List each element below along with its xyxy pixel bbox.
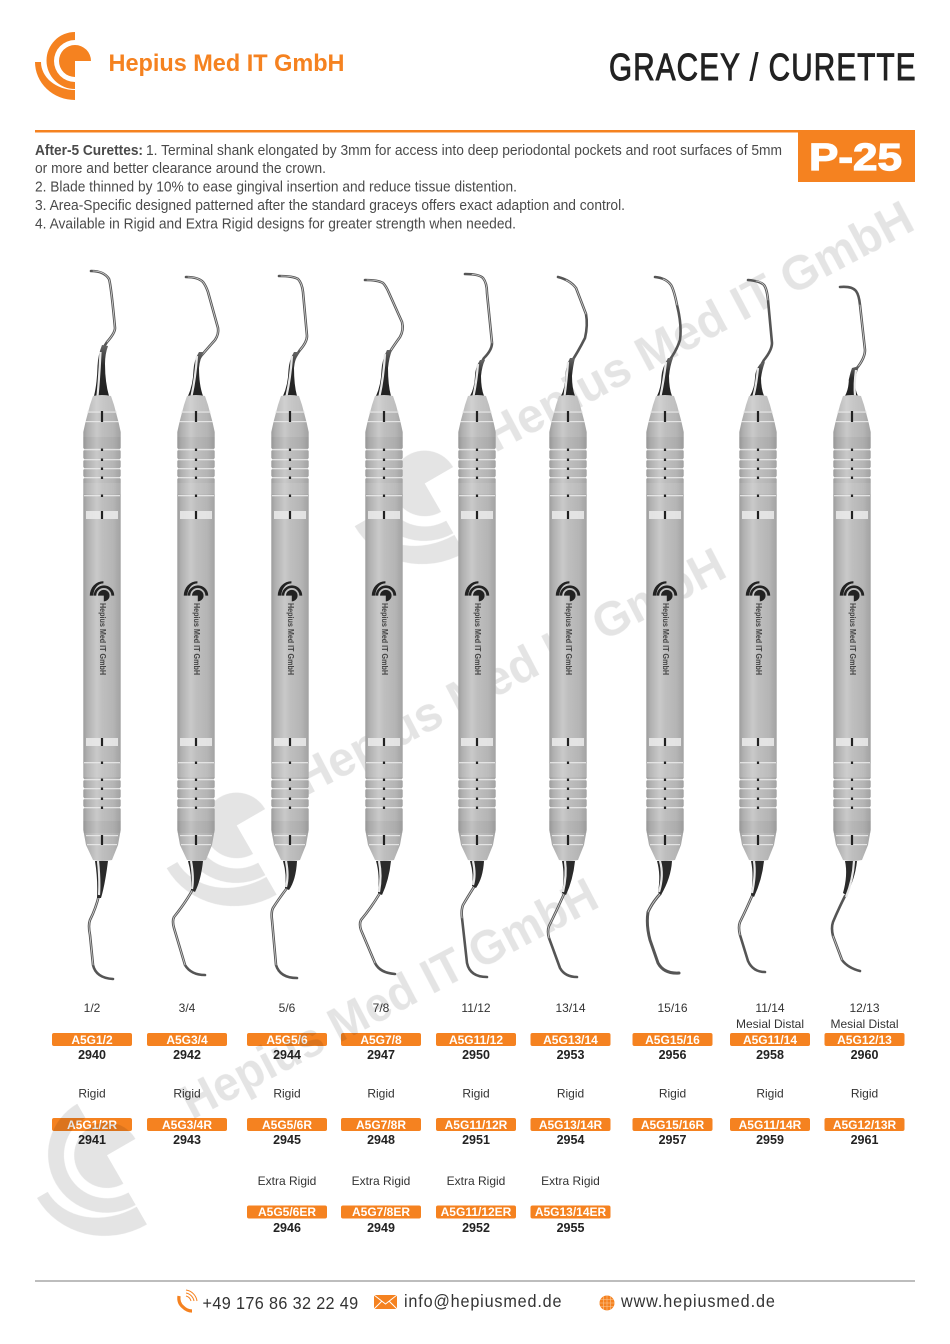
product codes: column 1/2: 2940 <box>78 1048 106 1062</box>
instrument 12/13 mesial distal: Hepius Med IT GmbH <box>848 603 857 675</box>
product codes: column 5/6 <box>247 1001 327 1235</box>
product codes: column 1/2: Rigid <box>78 1086 106 1100</box>
product codes: column 13/14: 2955 <box>557 1221 584 1235</box>
product codes: column 1/2: A5G1/2R <box>67 1118 117 1132</box>
phone number: +49 176 86 32 22 49 <box>202 1293 358 1313</box>
icon: phone <box>179 1290 197 1311</box>
logo icon <box>35 32 91 100</box>
orange rule <box>35 130 798 132</box>
product codes: column 1/2: 2941 <box>78 1133 106 1147</box>
product codes: column 11/12: A5G11/12R <box>445 1118 508 1132</box>
product codes: column 12/13 mesial distal: 2961 <box>851 1133 878 1147</box>
product codes: column 7/8: 2949 <box>367 1221 395 1235</box>
product codes: column 11/14 mesial distal: A5G11/14 <box>743 1033 797 1047</box>
product codes: column 3/4: Rigid <box>173 1086 201 1100</box>
product codes: column 5/6: A5G5/6R <box>262 1118 312 1132</box>
page code badge: P-25 <box>809 137 902 179</box>
product codes: column 7/8: A5G7/8R <box>356 1118 406 1132</box>
description text: 4. Available in Rigid and Extra Rigid designs for greater strength when needed. <box>35 216 516 232</box>
description text: After-5 Curettes: <box>35 142 143 159</box>
instrument 11/12 <box>458 274 496 977</box>
product codes: column 13/14: A5G13/14R <box>539 1118 603 1132</box>
product codes: column 11/12: 2950 <box>462 1048 490 1062</box>
product codes: column 15/16: 15/16 <box>657 1001 688 1015</box>
product codes: column 7/8: Rigid <box>367 1086 395 1100</box>
product codes: column 13/14: 13/14 <box>555 1001 586 1015</box>
product codes: column 11/14 mesial distal: Mesial Distal <box>736 1017 804 1031</box>
description text: or more and better clearance around the crown. <box>35 160 326 177</box>
title: GRACEY / CURETTE <box>609 47 916 89</box>
instrument 1/2 <box>83 271 121 979</box>
product codes: column 5/6: A5G5/6 <box>266 1033 308 1047</box>
product codes: column 3/4: A5G3/4R <box>162 1118 212 1132</box>
product codes: column 7/8: A5G7/8 <box>360 1033 402 1047</box>
product codes: column 15/16: A5G15/16R <box>641 1118 705 1132</box>
product codes: column 15/16: 2957 <box>659 1133 686 1147</box>
product codes: column 7/8: 2947 <box>367 1048 395 1062</box>
product codes: column 15/16: Rigid <box>659 1086 686 1100</box>
product codes: column 7/8 <box>341 1001 421 1235</box>
instrument 7/8: Hepius Med IT GmbH <box>380 603 389 675</box>
product codes: column 5/6: Extra Rigid <box>258 1174 316 1188</box>
description text: 2. Blade thinned by 10% to ease gingival insertion and reduce tissue distention. <box>35 178 517 196</box>
product codes: column 11/12: A5G11/12ER <box>441 1205 512 1219</box>
product codes: column 13/14: A5G13/14 <box>543 1033 598 1047</box>
product codes: column 12/13 mesial distal: Mesial Distal <box>830 1017 899 1031</box>
product codes: column 13/14: 2953 <box>557 1048 584 1062</box>
instrument 3/4 <box>173 277 218 975</box>
instrument 11/14 mesial distal: Hepius Med IT GmbH <box>754 603 763 675</box>
instrument 3/4: Hepius Med IT GmbH <box>192 603 201 675</box>
product codes: column 3/4: A5G3/4 <box>166 1033 208 1047</box>
description text <box>35 142 782 232</box>
instrument 11/12: Hepius Med IT GmbH <box>473 603 482 675</box>
product codes: column 11/14 mesial distal: 2959 <box>756 1133 784 1147</box>
product codes: column 5/6: A5G5/6ER <box>258 1205 316 1219</box>
instrument 15/16: Hepius Med IT GmbH <box>661 603 670 675</box>
product codes: column 13/14: 2954 <box>557 1133 584 1147</box>
description text: 1. Terminal shank elongated by 3mm for access into deep periodontal pockets and root surfaces of 5mm <box>146 142 782 159</box>
product codes: column 15/16 <box>632 1001 712 1147</box>
product codes: column 7/8: A5G7/8ER <box>352 1205 410 1219</box>
product codes: column 12/13 mesial distal: Rigid <box>851 1086 878 1100</box>
product codes: column 1/2 <box>52 1001 132 1147</box>
product codes: column 5/6: 2945 <box>273 1133 301 1147</box>
product codes: column 3/4: 3/4 <box>179 1001 196 1015</box>
brand name: Hepius Med IT GmbH <box>108 50 344 77</box>
product codes: column 11/12: A5G11/12 <box>449 1033 503 1047</box>
product codes: column 11/12: Rigid <box>462 1086 490 1100</box>
product codes: column 11/12: 2951 <box>462 1133 490 1147</box>
watermark: centre: Hepius Med IT GmbH <box>287 538 734 806</box>
instrument 13/14 <box>548 277 587 977</box>
website: www.hepiusmed.de <box>620 1291 775 1311</box>
product codes: column 15/16: A5G15/16 <box>645 1033 700 1047</box>
instrument 1/2: Hepius Med IT GmbH <box>98 603 107 675</box>
product codes: column 1/2: A5G1/2 <box>71 1033 113 1047</box>
instrument 15/16 <box>646 277 684 973</box>
product codes: column 5/6: 5/6 <box>279 1001 296 1015</box>
product codes: column 12/13 mesial distal: A5G12/13R <box>833 1118 897 1132</box>
instrument 5/6 <box>271 276 309 978</box>
product codes: column 11/14 mesial distal <box>730 1001 810 1147</box>
product codes: column 13/14: A5G13/14ER <box>535 1205 607 1219</box>
product codes: column 13/14: Extra Rigid <box>541 1174 600 1188</box>
product codes: column 13/14: Rigid <box>557 1086 584 1100</box>
product codes: column 11/12: Extra Rigid <box>447 1174 505 1188</box>
icon: email envelope <box>374 1295 397 1309</box>
product codes: column 12/13 mesial distal: A5G12/13 <box>837 1033 892 1047</box>
instrument 13/14: Hepius Med IT GmbH <box>564 603 573 675</box>
description text: 3. Area-Specific designed patterned after the standard graceys offers exact adaption and control. <box>35 197 625 214</box>
instrument 11/14 mesial distal <box>739 280 777 972</box>
instrument 5/6: Hepius Med IT GmbH <box>286 603 295 675</box>
product codes: column 12/13 mesial distal: 12/13 <box>849 1001 880 1015</box>
instrument 7/8 <box>360 280 403 974</box>
watermark: centre <box>136 538 734 936</box>
product codes: column 15/16: 2956 <box>659 1048 686 1062</box>
instrument 12/13 mesial distal <box>832 287 871 971</box>
product codes: column 11/12: 11/12 <box>461 1001 491 1015</box>
product codes: column 12/13 mesial distal: 2960 <box>851 1048 878 1062</box>
product codes: column 11/12: 2952 <box>462 1221 490 1235</box>
product codes: column 5/6: 2944 <box>273 1048 301 1062</box>
watermark: top right: Hepius Med IT GmbH <box>475 192 922 463</box>
product codes: column 1/2: 1/2 <box>84 1001 101 1015</box>
product codes: column 11/14 mesial distal: Rigid <box>756 1086 784 1100</box>
product codes: column 5/6: 2946 <box>273 1221 301 1235</box>
product codes: column 3/4 <box>147 1001 227 1147</box>
product codes: column 3/4: 2942 <box>173 1048 201 1062</box>
product codes: column 13/14 <box>530 1001 610 1235</box>
product codes: column 7/8: Extra Rigid <box>352 1174 410 1188</box>
product codes: column 11/12 <box>436 1001 516 1235</box>
product codes: column 11/14 mesial distal: A5G11/14R <box>739 1118 802 1132</box>
product codes: column 12/13 mesial distal <box>824 1001 904 1147</box>
product codes: column 7/8: 2948 <box>367 1133 395 1147</box>
product codes: column 11/14 mesial distal: 11/14 <box>755 1001 785 1015</box>
footer rule <box>35 1280 915 1282</box>
product codes: column 7/8: 7/8 <box>373 1001 390 1015</box>
page code badge <box>798 130 915 182</box>
email address: info@hepiusmed.de <box>404 1291 562 1311</box>
product codes: column 5/6: Rigid <box>273 1086 301 1100</box>
watermark: lower left <box>6 869 607 1265</box>
product codes: column 3/4: 2943 <box>173 1133 201 1147</box>
watermark: lower left: Hepius Med IT GmbH <box>173 869 607 1130</box>
product codes: column 11/14 mesial distal: 2958 <box>756 1048 784 1062</box>
icon: globe <box>600 1296 614 1310</box>
watermark: top right <box>324 192 922 594</box>
